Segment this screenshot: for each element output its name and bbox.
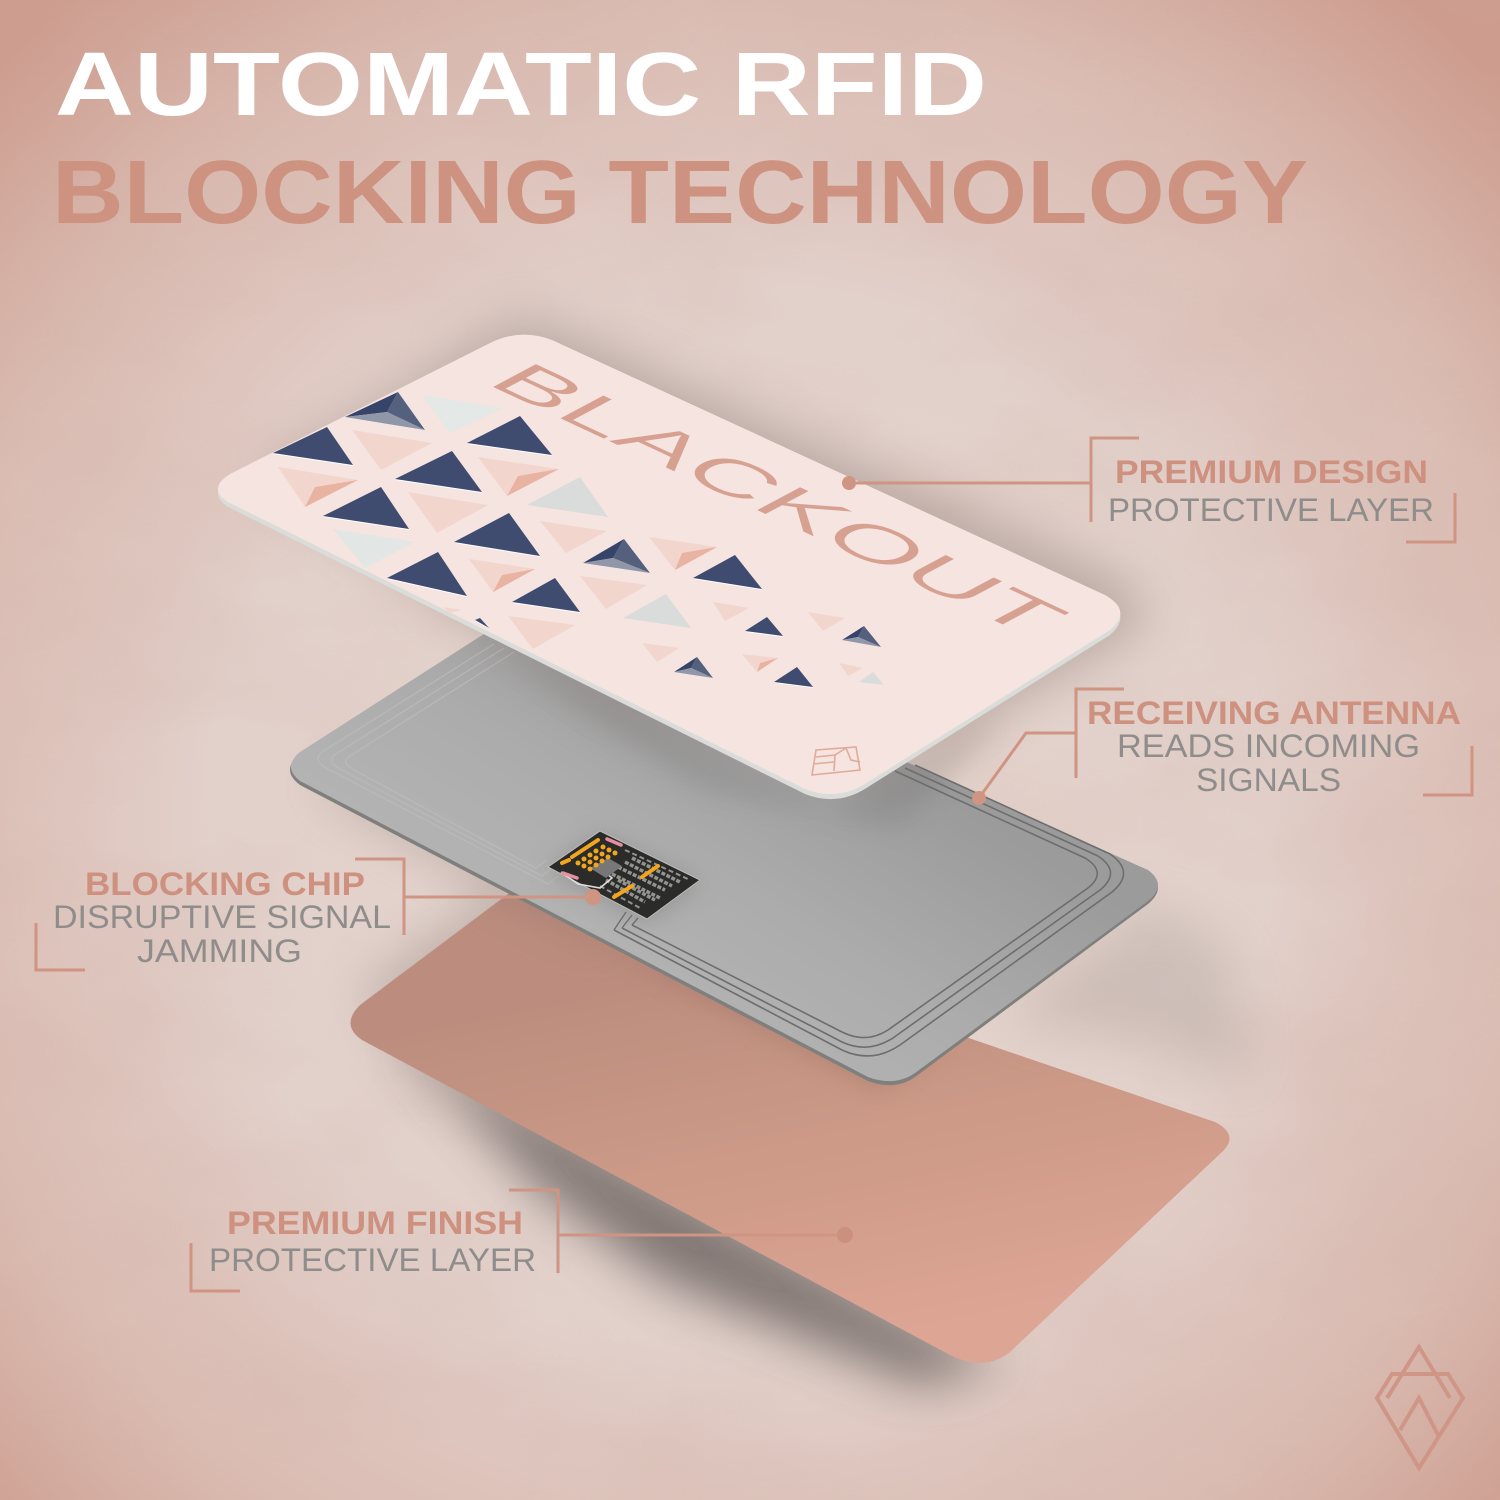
- callout heading: BLOCKING CHIP: [85, 866, 365, 902]
- top card shadow: [264, 316, 1144, 786]
- BLACKOUT engraved wordmark: BLACKOUT: [471, 352, 1086, 644]
- callout text: [1117, 728, 1420, 798]
- leader line: [404, 896, 593, 898]
- chip body: [548, 831, 700, 919]
- chip glow: [548, 836, 700, 921]
- callout: blocking chip: [36, 859, 601, 970]
- callout heading: PREMIUM FINISH: [227, 1205, 523, 1241]
- chip contact dots: [576, 844, 618, 872]
- card face: [291, 598, 1158, 1081]
- connecting coil stubs: [614, 912, 638, 930]
- callout text: DISRUPTIVE SIGNAL: [53, 899, 391, 935]
- card face: [218, 335, 1120, 794]
- callout text: PROTECTIVE LAYER: [1108, 492, 1434, 528]
- panel: grey antenna layer card: [290, 598, 1250, 1085]
- chip pink bars: [563, 839, 621, 878]
- antenna layer shadow on back layer: [713, 1000, 892, 1088]
- callout heading: RECEIVING ANTENNA: [1087, 695, 1461, 731]
- callout text: SIGNALS: [1196, 762, 1341, 798]
- icon: brand diamond logo: [1377, 1347, 1463, 1468]
- card edge: [290, 600, 1158, 1085]
- callout text: READS INCOMING: [1117, 728, 1420, 764]
- antenna coil lines, right: [614, 765, 1124, 1056]
- leader dot: [837, 1227, 853, 1243]
- leader dot: [972, 791, 986, 805]
- soft shadow at back layer left corner: [360, 880, 560, 1080]
- navy triangles: [273, 416, 813, 687]
- antenna coil lines, left: [318, 644, 558, 884]
- title line: white: AUTOMATIC RFID: [55, 35, 987, 135]
- panel: rose back layer card: [350, 880, 1230, 1385]
- bracket: [1091, 438, 1455, 542]
- leader dot: [585, 889, 601, 905]
- callout heading: PREMIUM DESIGN: [1115, 454, 1428, 490]
- callout text: [53, 899, 391, 969]
- panel: top card with BLACKOUT design: [218, 316, 1144, 830]
- icon: small card logo: [812, 747, 860, 775]
- chip orange bars: [562, 840, 658, 897]
- callout text: JAMMING: [137, 933, 302, 969]
- pale pink triangles: [352, 430, 863, 676]
- leader line: [849, 482, 1091, 484]
- shadow of antenna layer on background: [1000, 900, 1250, 1080]
- title: [52, 35, 1308, 243]
- bracket: [36, 859, 404, 970]
- leader dot: [842, 476, 856, 490]
- bracket: [1076, 689, 1472, 795]
- leader line: [979, 733, 1076, 798]
- shadow under back layer: [400, 1035, 1005, 1385]
- faceted navy triangles: [345, 392, 881, 678]
- icon: RFID chip: [548, 831, 700, 921]
- bracket: [191, 1190, 558, 1291]
- top card shadow on grey layer: [480, 640, 1000, 830]
- back layer face: [350, 885, 1230, 1363]
- callout: receiving antenna: [972, 689, 1472, 805]
- callout: premium finish: [191, 1190, 853, 1291]
- card edge: [218, 339, 1120, 799]
- callout: premium design: [842, 438, 1455, 542]
- leader line: [558, 1234, 845, 1236]
- two-tone pink triangles: [278, 457, 778, 672]
- title line: rose: BLOCKING TECHNOLOGY: [52, 143, 1308, 243]
- callout text: PROTECTIVE LAYER: [209, 1242, 536, 1278]
- silver triangles: [333, 395, 884, 685]
- chip circuitry: [561, 850, 690, 908]
